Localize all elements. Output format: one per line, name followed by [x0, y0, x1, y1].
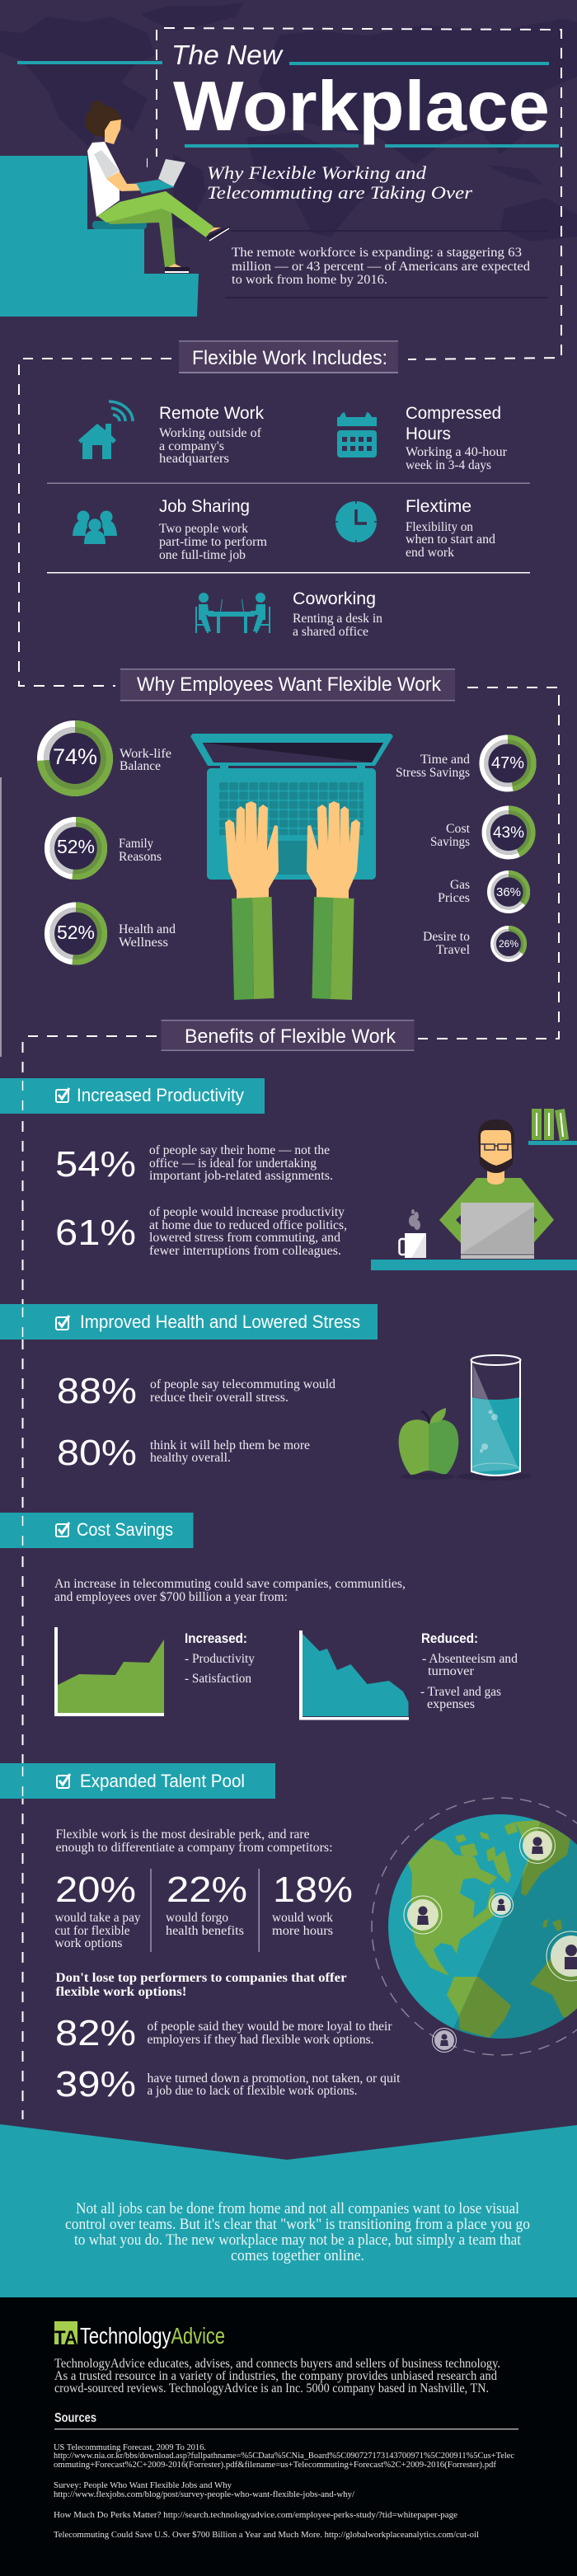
closing teal panel: comes together online.: [231, 2247, 364, 2264]
sources list: http://www.nia.or.kr/bbs/download.asp?fullpathname=%5CData%5CNia_Board%5C090727173143700971%5C200911%5Cus+Telec: [54, 2451, 514, 2461]
heading: Flexible Work Includes: Flexible Work Includes:: [192, 347, 387, 369]
stat: 61%: 61%: [55, 1213, 136, 1253]
stat: 61%: fewer interruptions from colleagues.: [149, 1244, 341, 1258]
closing teal panel: Not all jobs can be done from home and not all companies want to lose visual: [76, 2200, 519, 2217]
stat: 22%: would forgo: [166, 1911, 228, 1925]
illustration: apple: [399, 1408, 458, 1480]
sources list: US Telecommuting Forecast, 2009 To 2016.: [54, 2442, 206, 2452]
background world map: [0, 2, 577, 242]
donut: 74% work-life balance: 74%: [53, 744, 97, 769]
item: job sharing: Two people work: [159, 522, 248, 536]
cost savings intro: [54, 1577, 406, 1604]
logo: TechnologyAdvice: [80, 2323, 225, 2348]
stat: 88%: [57, 1371, 335, 1411]
stat: 82%: 82%: [55, 2013, 136, 2053]
illustration: laptop with hands: [190, 734, 393, 1000]
stat: 88%: of people say telecommuting would: [150, 1377, 335, 1391]
company description: crowd-sourced reviews. TechnologyAdvice is an Inc. 5000 company based in Nashville, TN.: [54, 2381, 489, 2395]
teal title rules: [17, 61, 559, 148]
reduced list: Reduced:: [421, 1631, 478, 1646]
item: job sharing: one full-time job: [159, 548, 246, 562]
left hand and sleeve: [225, 801, 279, 1000]
donut: 74% work-life balance: [40, 724, 171, 793]
chart: increased area: [54, 1627, 164, 1716]
stat: 22%: health benefits: [166, 1924, 244, 1938]
icon: checkbox: [56, 1523, 69, 1537]
increased list: - Satisfaction: [185, 1672, 251, 1686]
stat: 54%: 54%: [55, 1144, 136, 1185]
stat: 20%: [54, 1870, 141, 1950]
closing teal panel: [0, 2124, 577, 2297]
section bar: Increased Productivity: Increased Productivity: [77, 1085, 244, 1105]
section bar: Expanded Talent Pool: Expanded Talent Pool: [80, 1771, 245, 1791]
donut: 43% cost savings: [430, 808, 533, 857]
donut: 36% gas prices: Prices: [438, 891, 470, 905]
donut: 26% desire to travel: [423, 927, 525, 960]
icon: checkbox: [56, 1316, 69, 1330]
donut: 36% gas prices: Gas: [450, 878, 470, 892]
donut: 43% cost savings: Cost: [446, 822, 471, 836]
subtitle: [207, 162, 473, 203]
illustration: man at desk: [371, 1109, 577, 1270]
cost savings intro: and employees over $700 billion a year from:: [54, 1590, 288, 1604]
callout: flexible work options!: [56, 1985, 187, 1999]
section bar: Cost Savings: [0, 1513, 193, 1548]
heading: Benefits of Flexible Work: Benefits of Flexible Work: [185, 1025, 396, 1048]
chart: reduced area: [299, 1631, 409, 1720]
sources heading: Sources: [54, 2411, 96, 2425]
pin: [519, 1828, 556, 1863]
stat: 88%: reduce their overall stress.: [150, 1391, 288, 1405]
company description: TechnologyAdvice educates, advises, and connects buyers and sellers of business technology.: [54, 2357, 500, 2371]
intro text: [225, 230, 548, 298]
item: flextime: Flexibility on: [406, 520, 473, 534]
cost savings intro: An increase in telecommuting could save companies, communities,: [54, 1577, 406, 1591]
subtitle: Why Flexible Working and: [207, 162, 427, 183]
sources list: How Much Do Perks Matter? http://search.technologyadvice.com/employee-perks-study/?tid=whitepaper-page: [54, 2510, 457, 2520]
stat: 88%: 88%: [57, 1371, 137, 1411]
pin: [432, 2028, 457, 2053]
sources list: [54, 2442, 514, 2540]
company description: As a trusted resource in a variety of industries, the company provides unbiased research and: [54, 2369, 497, 2383]
logo: TA: [54, 2327, 77, 2349]
donut: 52% health and wellness: Health and: [119, 922, 176, 936]
item: coworking: [195, 589, 382, 639]
stat: 82%: employers if they had flexible work options.: [147, 2033, 374, 2047]
donut: 74% work-life balance: Work-life: [120, 747, 171, 761]
item: compressed hours: Hours: [406, 425, 451, 443]
icon: coworking desk: [195, 593, 270, 633]
item: coworking: Coworking: [293, 589, 376, 608]
intro text: to work from home by 2016.: [232, 273, 387, 287]
intro text: The remote workforce is expanding: a staggering 63: [232, 246, 522, 260]
item: remote work: headquarters: [159, 452, 229, 466]
dashed path: [1, 28, 561, 2119]
stat: 39%: [55, 2064, 401, 2104]
donut: 26% desire to travel: 26%: [499, 938, 518, 950]
subtitle: Telecommuting are Taking Over: [207, 182, 473, 203]
item: coworking: a shared office: [293, 625, 368, 639]
stat: 80%: healthy overall.: [150, 1451, 231, 1465]
item: compressed hours: week in 3-4 days: [406, 458, 491, 472]
title: [171, 40, 550, 146]
stat: 18%: 18%: [273, 1870, 353, 1910]
stat: 39%: 39%: [55, 2064, 136, 2104]
reduced list: - Travel and gas: [420, 1685, 501, 1699]
item: compressed hours: Compressed: [406, 404, 501, 423]
heading: Flexible Work Includes: [179, 340, 398, 373]
stat: 54%: office — is ideal for undertaking: [149, 1157, 317, 1171]
stat: 80%: 80%: [57, 1433, 137, 1473]
donut: 47% time and stress savings: Time and: [420, 753, 470, 767]
donut: 36% gas prices: [438, 872, 528, 912]
donut: 52% health and wellness: 52%: [57, 922, 95, 943]
donut: 52% family reasons: Reasons: [119, 850, 162, 864]
stat: 39%: a job due to lack of flexible work options.: [147, 2084, 358, 2098]
stat: 22%: 22%: [167, 1870, 247, 1910]
item: flextime: [335, 497, 495, 560]
item: remote work: a company's: [159, 439, 224, 453]
donut: 47% time and stress savings: Stress Savings: [396, 766, 470, 780]
icon: house with wifi: [78, 401, 133, 459]
sources list: Survey: People Who Want Flexible Jobs and Why: [54, 2480, 232, 2490]
talent pool intro: enough to differentiate a company from competitors:: [56, 1841, 333, 1855]
stat: 80%: [57, 1433, 310, 1473]
teal stairs: [0, 156, 199, 317]
icon: checkbox: [56, 1088, 69, 1102]
stat: 20%: would take a pay: [54, 1911, 141, 1925]
donut: 52% family reasons: 52%: [57, 836, 95, 857]
stat: 18%: would work: [272, 1911, 333, 1925]
section bar: Increased Productivity: [0, 1078, 265, 1114]
stat: 80%: think it will help them be more: [150, 1438, 310, 1452]
donut: 52% health and wellness: Wellness: [119, 936, 168, 950]
pin: [404, 1896, 442, 1934]
stat: 20%: cut for flexible: [54, 1924, 130, 1938]
stat: 82%: of people said they would be more loyal to their: [147, 2020, 392, 2034]
item: compressed hours: [337, 404, 508, 472]
stat: 61%: lowered stress from commuting, and: [149, 1231, 340, 1245]
sources list: ommuting+Forecast%2C+2009-2016(Forrester).pdf&filename=us+Telecommuting+Forecast%2C+2009-2016(Forrester).pdf: [54, 2460, 496, 2470]
item: flextime: when to start and: [406, 533, 495, 547]
increased list: [185, 1631, 255, 1686]
title: The New: [171, 40, 284, 70]
item: flextime: Flextime: [406, 497, 471, 516]
section bar: Improved Health and Lowered Stress: [0, 1304, 378, 1340]
stat: 22%: [166, 1870, 247, 1938]
donut: 52% health and wellness: [47, 905, 176, 962]
item: remote work: [78, 401, 264, 466]
donut: 43% cost savings: 43%: [493, 824, 524, 842]
heading: Benefits of Flexible Work: [162, 1020, 414, 1051]
stat: 20%: work options: [54, 1936, 122, 1950]
illustration: glass of water: [457, 1355, 532, 1480]
increased list: - Productivity: [185, 1652, 255, 1666]
callout: Don't lose top performers to companies that offer: [56, 1971, 347, 1985]
right hand and sleeve: [307, 801, 360, 1000]
section bar: Expanded Talent Pool: [0, 1763, 275, 1799]
item: flextime: end work: [406, 546, 454, 560]
pin: [547, 1931, 577, 1981]
closing teal panel: to what you do. The new workplace may not be a place, but simply a team that: [74, 2231, 522, 2249]
donut: 52% family reasons: Family: [119, 837, 153, 851]
talent pool intro: Flexible work is the most desirable perk, and rare: [56, 1828, 310, 1842]
heading: Why Employees Want Flexible Work: Why Employees Want Flexible Work: [137, 673, 442, 696]
talent pool intro: [56, 1828, 333, 1855]
stat: 20%: 20%: [55, 1870, 136, 1910]
intro text: million — or 43 percent — of Americans are expected: [232, 260, 530, 274]
item: remote work: Remote Work: [159, 404, 264, 423]
reduced list: expenses: [427, 1697, 475, 1711]
donut: 43% cost savings: Savings: [430, 835, 470, 849]
icon: three people: [73, 511, 117, 544]
stat: 61%: [55, 1205, 347, 1258]
donut: 47% time and stress savings: 47%: [491, 754, 524, 772]
sources list: http://www.flexjobs.com/blog/post/survey-people-who-want-flexible-jobs-and-why/: [54, 2489, 355, 2499]
section bar: Cost Savings: Cost Savings: [77, 1519, 173, 1540]
stat: 54%: [55, 1143, 333, 1185]
donut: 26% desire to travel: Desire to: [423, 930, 470, 944]
icon: clock: [335, 501, 377, 542]
item: job sharing: part-time to perform: [159, 535, 267, 549]
stat: 82%: [55, 2013, 392, 2053]
stat: 18%: more hours: [272, 1924, 333, 1938]
section bar: Improved Health and Lowered Stress: Improved Health and Lowered Stress: [80, 1311, 360, 1332]
icon: books on shelf: [528, 1109, 577, 1145]
item: remote work: Working outside of: [159, 426, 262, 440]
increased list: Increased:: [185, 1631, 247, 1646]
icon: calendar: [337, 412, 377, 457]
stat: 54%: of people say their home — not the: [149, 1143, 330, 1157]
stat: 54%: important job-related assignments.: [149, 1169, 333, 1183]
item: compressed hours: Working a 40-hour: [406, 445, 508, 459]
company description: [54, 2357, 500, 2395]
sources list: Telecommuting Could Save U.S. Over $700 Billion a Year and Much More. http://globalworkplaceanalytics.com/cut-oil: [54, 2530, 479, 2540]
stat: 61%: of people would increase productivity: [149, 1205, 345, 1219]
pin: [490, 1893, 513, 1917]
reduced list: - Absenteeism and: [422, 1652, 518, 1666]
donut: 52% family reasons: [47, 819, 162, 877]
title: Workplace: [173, 68, 550, 146]
donut: 47% time and stress savings: [396, 737, 534, 790]
item: job sharing: Job Sharing: [159, 497, 250, 516]
footer panel: [0, 2297, 577, 2576]
item: job sharing: [73, 497, 267, 562]
reduced list: turnover: [428, 1664, 475, 1678]
item: coworking: Renting a desk in: [293, 612, 382, 626]
icon: coffee mug: [399, 1209, 426, 1258]
donut: 36% gas prices: 36%: [496, 885, 521, 899]
donut: 74% work-life balance: Balance: [120, 759, 161, 773]
callout: [56, 1971, 347, 1999]
stat: 39%: have turned down a promotion, not taken, or quit: [147, 2072, 401, 2086]
illustration: woman with laptop: [85, 101, 230, 273]
closing teal panel: control over teams. But it's clear that "work" is transitioning from a place you go: [65, 2216, 530, 2233]
heading: Why Employees Want Flexible Work: [120, 669, 455, 701]
illustration: globe with people pins: [372, 1798, 577, 2055]
reduced list: [420, 1631, 518, 1711]
stat: 61%: at home due to reduced office politics,: [149, 1218, 347, 1232]
icon: checkbox: [57, 1774, 70, 1788]
donut: 26% desire to travel: Travel: [436, 943, 470, 957]
stat: 18%: [272, 1870, 353, 1938]
